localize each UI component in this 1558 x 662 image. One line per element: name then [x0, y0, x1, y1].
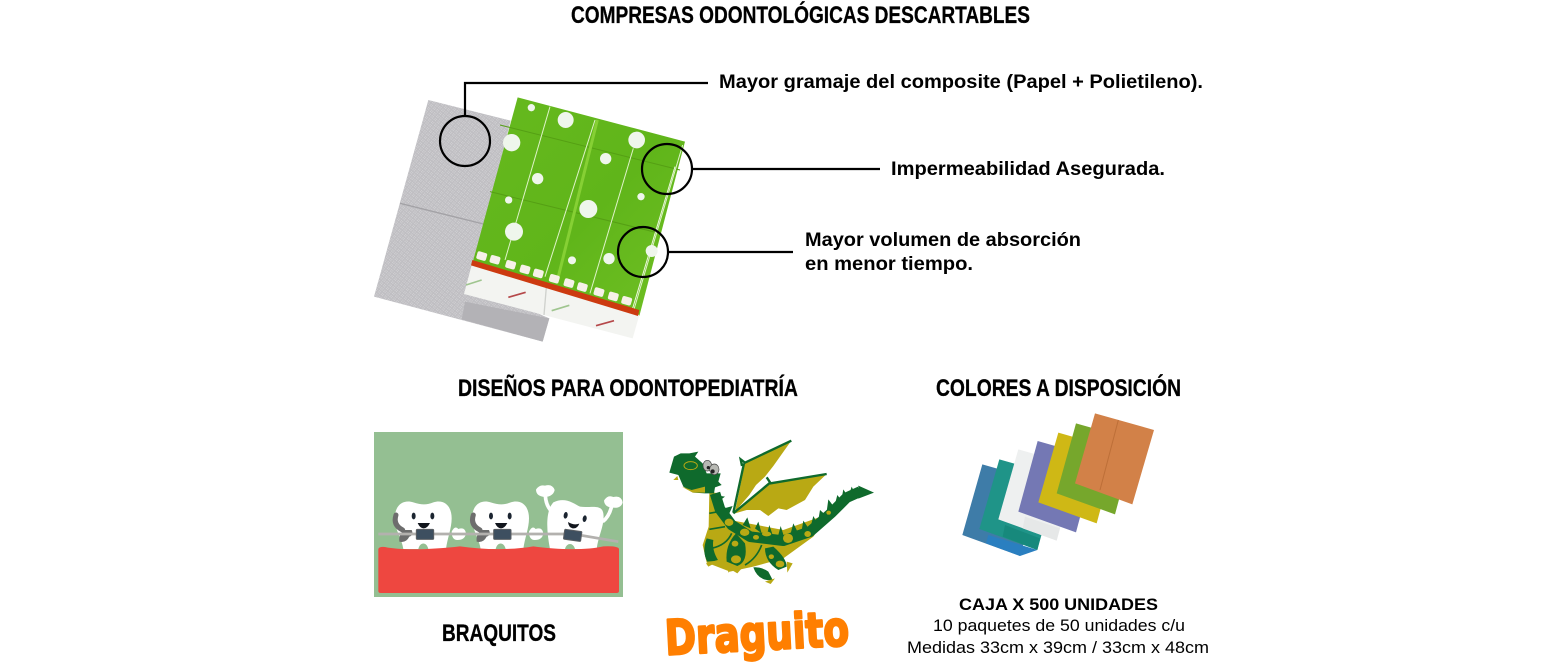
callout marker: absorcion — [618, 227, 793, 277]
wire — [378, 534, 618, 542]
title: COMPRESAS ODONTOLÓGICAS DESCARTABLES — [571, 1, 1030, 29]
callout text: gramaje: Mayor gramaje del composite (Papel + Polietileno). — [719, 72, 1203, 93]
head — [669, 452, 722, 493]
text block: box details: Medidas 33cm x 39cm / 33cm x 48cm — [907, 638, 1209, 657]
orange sheet — [1075, 413, 1154, 504]
panel: braquitos illustration — [374, 432, 623, 597]
legs — [704, 533, 793, 584]
heading: colores: COLORES A DISPOSICIÓN — [936, 374, 1181, 402]
green background — [374, 432, 623, 597]
brackets — [416, 529, 582, 541]
illustration: green dragon — [669, 441, 874, 584]
callout text: absorcion: en menor tiempo. — [805, 254, 973, 275]
tail tip and spikes — [714, 486, 874, 537]
neck and belly stripes — [709, 512, 762, 565]
olive belly — [703, 492, 830, 572]
heading: disenos: DISEÑOS PARA ODONTOPEDIATRÍA — [458, 374, 798, 402]
callout text: absorcion — [805, 230, 1081, 275]
blue sheet — [962, 464, 1041, 556]
panel: product photo of napkins — [374, 97, 685, 342]
green sheet — [1057, 423, 1135, 514]
teal sheet — [979, 459, 1058, 550]
tooth two — [472, 501, 543, 549]
gums — [378, 546, 619, 593]
callout text: absorcion: Mayor volumen de absorción — [805, 230, 1081, 251]
gray absorbent sheet — [374, 100, 549, 342]
white sheet — [998, 449, 1077, 541]
text block: box details: CAJA X 500 UNIDADES — [959, 595, 1158, 614]
illustration: stacked color sheets — [962, 413, 1154, 556]
white dots on green sheet — [503, 104, 658, 264]
spots on back — [725, 511, 831, 543]
callout text: impermeabilidad: Impermeabilidad Asegurada. — [891, 159, 1165, 180]
purple sheet — [1018, 441, 1096, 532]
callout marker: impermeabilidad — [642, 144, 880, 194]
red stripe — [471, 260, 639, 316]
white lower band — [464, 265, 639, 338]
tooth three with raised arms — [536, 485, 623, 549]
row of tooth characters — [476, 251, 633, 306]
text block: box details: 10 paquetes de 50 unidades c/u — [933, 616, 1185, 635]
yellow sheet — [1038, 433, 1117, 523]
label: braquitos: BRAQUITOS — [442, 620, 556, 647]
green printed sheet — [464, 97, 685, 338]
callout marker: gramaje — [440, 83, 708, 166]
green back and tail — [715, 492, 860, 541]
tooth one — [395, 501, 466, 549]
small printed logos — [466, 280, 614, 326]
text block: box details — [907, 595, 1209, 657]
wings — [733, 441, 827, 516]
